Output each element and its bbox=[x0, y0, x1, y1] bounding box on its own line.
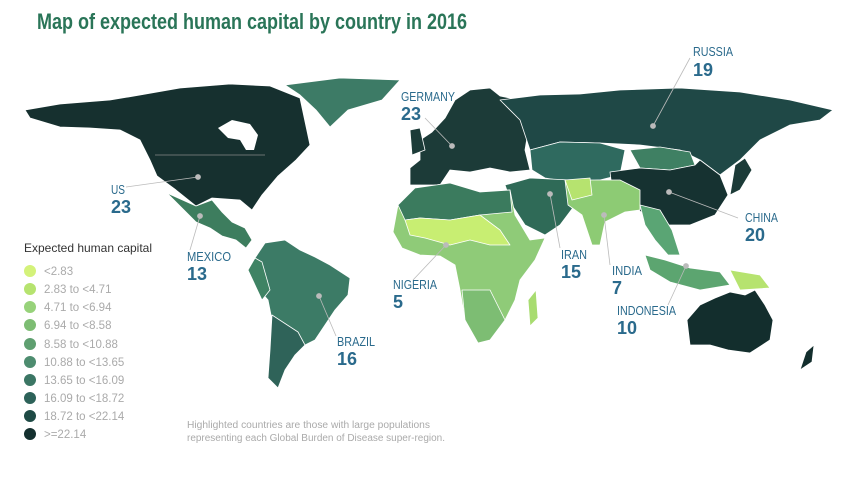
country labels: CHINA bbox=[745, 210, 778, 225]
legend: 16.09 to <18.72 bbox=[44, 393, 124, 405]
legend: 18.72 to <22.14 bbox=[44, 411, 125, 423]
region: mongolia bbox=[630, 147, 695, 170]
region: greenland bbox=[285, 78, 400, 127]
country labels: 19 bbox=[693, 60, 713, 80]
hudson bay bbox=[218, 120, 258, 150]
country labels: 15 bbox=[561, 262, 581, 282]
region: se asia bbox=[640, 205, 680, 255]
region: north america bbox=[25, 84, 310, 210]
country labels bbox=[111, 44, 778, 369]
country labels: 20 bbox=[745, 225, 765, 245]
footnote bbox=[187, 420, 445, 444]
legend: <2.83 bbox=[44, 266, 73, 278]
footnote: Highlighted countries are those with large populations bbox=[187, 420, 430, 431]
legend: >=22.14 bbox=[44, 429, 87, 441]
region: china bbox=[610, 160, 728, 225]
footnote: representing each Global Burden of Disease super-region. bbox=[187, 433, 445, 444]
country labels: INDONESIA bbox=[617, 303, 676, 318]
region: australia bbox=[687, 290, 773, 353]
country labels: 16 bbox=[337, 349, 357, 369]
region: africa bbox=[393, 183, 545, 343]
region: india south asia bbox=[565, 180, 640, 245]
legend: 13.65 to <16.09 bbox=[44, 375, 124, 387]
legend: 8.58 to <10.88 bbox=[44, 339, 118, 351]
country labels: 7 bbox=[612, 278, 622, 298]
country labels: INDIA bbox=[612, 263, 642, 278]
title: Map of expected human capital by country in 2016 bbox=[37, 9, 467, 34]
country labels: 23 bbox=[401, 104, 421, 124]
country labels: 5 bbox=[393, 292, 403, 312]
legend: 4.71 to <6.94 bbox=[44, 302, 112, 314]
region: indonesia bbox=[645, 255, 730, 290]
country labels: BRAZIL bbox=[337, 334, 375, 349]
region: europe bbox=[410, 88, 530, 185]
legend: 2.83 to <4.71 bbox=[44, 284, 111, 296]
region: japan korea bbox=[730, 158, 752, 195]
legend: Expected human capital bbox=[24, 241, 152, 255]
country labels: 13 bbox=[187, 264, 207, 284]
region: south america bbox=[248, 240, 350, 388]
country labels: NIGERIA bbox=[393, 277, 437, 292]
map bbox=[25, 78, 833, 388]
country labels: RUSSIA bbox=[693, 44, 733, 59]
leader lines and dots bbox=[126, 58, 738, 336]
region: russia bbox=[500, 88, 833, 175]
country labels: 10 bbox=[617, 318, 637, 338]
legend: 6.94 to <8.58 bbox=[44, 320, 111, 332]
region: mexico and central america bbox=[167, 193, 252, 248]
country labels: MEXICO bbox=[187, 249, 231, 264]
country labels: 23 bbox=[111, 197, 131, 217]
region: middle east bbox=[505, 178, 575, 235]
legend bbox=[24, 241, 152, 441]
region: central asia bbox=[530, 142, 625, 182]
country labels: GERMANY bbox=[401, 89, 455, 104]
country labels: US bbox=[111, 182, 125, 197]
legend: 10.88 to <13.65 bbox=[44, 357, 124, 369]
country labels: IRAN bbox=[561, 247, 587, 262]
